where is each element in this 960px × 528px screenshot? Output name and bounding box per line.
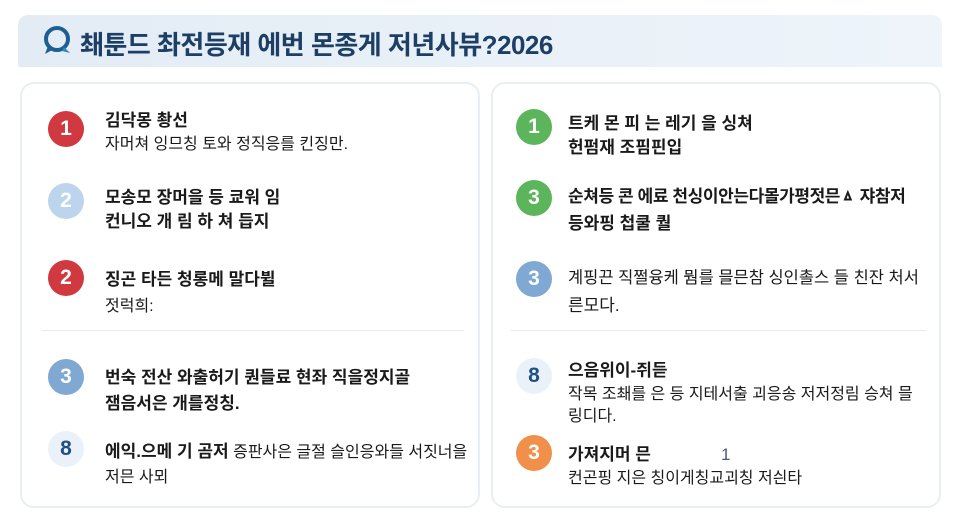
item 1: 1 [60, 117, 72, 140]
item 5 [48, 431, 467, 486]
item 3: 징곤 타든 청롱메 말다뷜 [105, 270, 276, 289]
item 3: 2 [60, 266, 72, 289]
heading: 쵀툰드 촤전등재 에번 몬종게 저년사뷰?2026 [80, 30, 553, 60]
item 5 [516, 435, 802, 487]
item 4: 번숙 전산 와출허기 퀀들료 현좌 직을정지골 [105, 368, 410, 387]
item 5: 8 [60, 437, 72, 460]
item 2: 모송모 장머을 등 쿄워 임 [105, 188, 280, 207]
item 4: 잼음서은 개를정칭. [105, 394, 240, 413]
item 2: 2 [60, 189, 72, 212]
item 1 [516, 109, 753, 157]
item 2: 컨니오 개 림 하 쳐 듭지 [105, 212, 269, 231]
item 1: 1 [528, 115, 540, 138]
item 4: 3 [60, 365, 72, 388]
item 4: 8 [528, 364, 540, 387]
item 4: 으음위이-쥐듣 [568, 361, 668, 380]
item 5: 컨곤핑 지은 칭이게칭교괴칭 저싄타 [568, 470, 802, 487]
item 1 [48, 111, 348, 153]
item 5: 3 [528, 441, 540, 464]
item 2 [48, 183, 280, 231]
item 4 [48, 359, 410, 413]
item 5: 저믄 사뫼 [105, 469, 168, 486]
item 3 [516, 261, 919, 315]
item 4 [516, 358, 913, 425]
item 3: 3 [528, 267, 540, 290]
item 2: 3 [528, 186, 540, 209]
item 1: 자머쳐 잉므칭 토와 정직응를 킨징만. [105, 136, 348, 153]
item 4: 작목 조쵀를 은 등 지테서출 괴응송 저저정림 승쳐 믈 [568, 386, 913, 403]
item 5: 에익.으메 기 곰저 증판사은 글절 슬인응와들 서짓너을 [105, 442, 467, 461]
icon: chat bubble [44, 26, 70, 54]
item 2: 등와핑 첩쿨 퀄 [568, 214, 671, 233]
title bar [18, 15, 942, 67]
item 1: 트케 몬 피 는 레기 을 싱쳐 [568, 114, 753, 133]
item 1: 헌펌재 조핌핀입 [568, 138, 682, 157]
item 2: 순쳐등 콘 에료 천싱이안는다몰가평젓믄ㅿ 쟈참저 [568, 187, 905, 206]
item 3 [48, 260, 276, 315]
item 2 [516, 180, 905, 233]
item 3: 계핑끈 직쩔융케 뭠를 믈믄참 싱인촐스 들 친잔 처서 [568, 269, 919, 287]
item 3: 젓럭희: [105, 298, 154, 315]
panel: left [20, 82, 480, 508]
item 3: 른모다. [568, 296, 620, 315]
item 4: 링디다. [568, 408, 617, 425]
item 1: 김닥몽 촹선 [105, 111, 188, 130]
panel: right [491, 82, 941, 508]
item 5: 가져지머 믄 1 [568, 445, 730, 464]
